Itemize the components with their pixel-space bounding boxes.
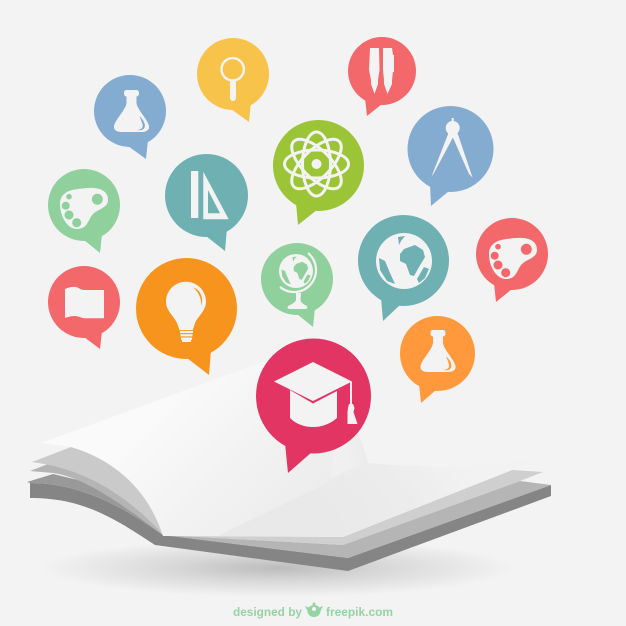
bubble: palette red (476, 218, 548, 302)
bubble: atom green (273, 120, 364, 225)
bubble: ruler teal (165, 154, 248, 251)
ground shadow (42, 539, 514, 597)
page fold shading (330, 400, 368, 478)
book cover (30, 483, 551, 571)
icon: flask (114, 90, 149, 132)
icon: freepik logo (305, 602, 323, 617)
bubble: compass blue (408, 106, 494, 206)
icon: graduation cap (274, 362, 358, 427)
bubble: flask blue (94, 75, 166, 159)
left page stack (27, 447, 163, 535)
icon: globe (376, 233, 432, 289)
bubble: flask orange (400, 316, 475, 403)
credit text: designed by: designed by (233, 606, 303, 619)
bubble: light bulb orange (136, 258, 237, 375)
main left page (41, 360, 368, 537)
bubble: graduation cap pink (256, 338, 371, 473)
bubble: small globe green (261, 243, 333, 327)
bubble: book red (48, 266, 120, 349)
open book (27, 360, 551, 571)
bubble: pens red (348, 37, 416, 116)
icon: magnifier (222, 58, 244, 98)
icon: pens (369, 48, 394, 94)
icon: palette (489, 238, 537, 279)
right page stack (163, 470, 551, 558)
icon: compass (432, 118, 472, 178)
bubble: magnifier yellow (197, 38, 269, 122)
icon: open book (65, 287, 104, 318)
bubble: palette green (48, 169, 120, 253)
main right page (218, 459, 537, 537)
credit text: freepik.com: freepik.com (326, 606, 393, 619)
footer credit (233, 602, 393, 619)
icon: flask (420, 330, 456, 372)
icon: atom (284, 131, 349, 197)
icon: globe on stand (279, 253, 316, 309)
icon: light bulb (166, 282, 206, 342)
icon: palette (60, 188, 108, 229)
bubble: globe teal (358, 215, 449, 321)
icon: ruler and set square (191, 171, 229, 219)
